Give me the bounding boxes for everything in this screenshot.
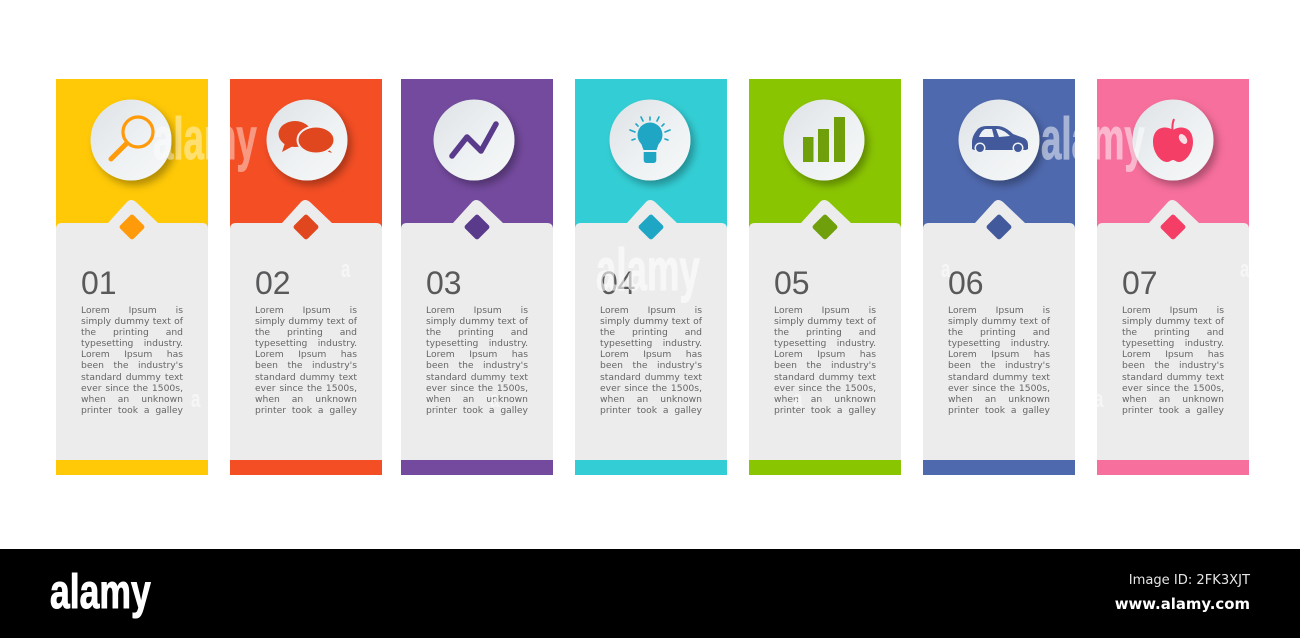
icon: light bulb — [610, 100, 690, 180]
watermark fragments: a — [490, 386, 499, 413]
body text: printer took a galley — [948, 405, 1050, 416]
body text: Lorem Ipsum has — [255, 349, 357, 360]
body text: simply dummy text of — [948, 316, 1050, 327]
icon: diamond marker — [986, 214, 1012, 240]
icon: diamond marker — [119, 214, 145, 240]
body text: ever since the 1500s, — [774, 383, 876, 394]
body text: when an unknown — [81, 394, 183, 405]
watermark: upper right: alamy — [1041, 106, 1145, 172]
body text: simply dummy text of — [255, 316, 357, 327]
body text: printer took a galley — [426, 405, 528, 416]
body text — [255, 305, 358, 416]
body text: Lorem Ipsum has — [948, 349, 1050, 360]
body text: standard dummy text — [426, 372, 528, 383]
body text: simply dummy text of — [426, 316, 528, 327]
watermark fragments: a — [941, 256, 950, 283]
body text: typesetting industry. — [81, 338, 183, 349]
body text: the printing and — [600, 327, 702, 338]
icon: bar chart — [784, 100, 864, 180]
icon: car — [958, 100, 1040, 180]
body text — [1122, 305, 1224, 416]
body text: been the industry's — [426, 360, 528, 371]
watermark fragments: a — [191, 386, 200, 413]
icon: magnifying glass — [90, 100, 172, 180]
icon: diamond marker — [638, 214, 664, 240]
step number: 06 — [948, 265, 984, 301]
body text — [774, 305, 876, 416]
step number: 02 — [255, 265, 291, 301]
body text: simply dummy text of — [1122, 316, 1224, 327]
panel: step 06 — [923, 79, 1075, 475]
body text: the printing and — [81, 327, 183, 338]
body text — [426, 305, 528, 416]
body text: Lorem Ipsum has — [1122, 349, 1224, 360]
body text: when an unknown — [255, 394, 357, 405]
body text: typesetting industry. — [426, 338, 528, 349]
body text: Lorem Ipsum has — [81, 349, 183, 360]
body text: standard dummy text — [774, 372, 876, 383]
body text: typesetting industry. — [600, 338, 702, 349]
body text — [81, 305, 184, 416]
body text: Lorem Ipsum has — [600, 349, 702, 360]
body text: simply dummy text of — [600, 316, 702, 327]
body text: standard dummy text — [600, 372, 702, 383]
body text: the printing and — [426, 327, 528, 338]
body text: Lorem Ipsum is — [774, 305, 876, 316]
body text: Lorem Ipsum has — [426, 349, 528, 360]
body text: ever since the 1500s, — [1122, 383, 1224, 394]
body text: standard dummy text — [948, 372, 1050, 383]
body text: been the industry's — [255, 360, 357, 371]
icon: diamond marker — [812, 214, 838, 240]
body text: been the industry's — [948, 360, 1050, 371]
body text: when an unknown — [948, 394, 1050, 405]
watermark: centre: alamy — [596, 237, 700, 303]
body text: ever since the 1500s, — [426, 383, 528, 394]
watermark fragments: a — [1240, 256, 1249, 283]
body text: printer took a galley — [81, 405, 183, 416]
body text: standard dummy text — [255, 372, 357, 383]
panel: step 07 — [1097, 79, 1249, 475]
panel: step 03 — [401, 79, 553, 475]
body text: ever since the 1500s, — [255, 383, 357, 394]
body text: been the industry's — [774, 360, 876, 371]
body text: simply dummy text of — [774, 316, 876, 327]
icon: diamond marker — [293, 214, 319, 240]
body text: typesetting industry. — [1122, 338, 1224, 349]
body text: the printing and — [948, 327, 1050, 338]
body text: when an unknown — [600, 394, 702, 405]
panel: step 04 — [575, 79, 727, 475]
body text: simply dummy text of — [81, 316, 183, 327]
website: www.alamy.com — [1115, 595, 1250, 613]
body text: Lorem Ipsum is — [255, 305, 357, 316]
body text: printer took a galley — [600, 405, 702, 416]
watermark: upper left: alamy — [153, 106, 257, 172]
step number: 03 — [426, 265, 462, 301]
body text: been the industry's — [81, 360, 183, 371]
body text: the printing and — [255, 327, 357, 338]
body text: the printing and — [774, 327, 876, 338]
step number: 01 — [81, 265, 117, 301]
body text: Lorem Ipsum is — [81, 305, 183, 316]
body text: typesetting industry. — [774, 338, 876, 349]
footer bar — [0, 549, 1300, 638]
watermark fragments: a — [341, 256, 350, 283]
step number: 07 — [1122, 265, 1158, 301]
icon: trend line — [434, 100, 514, 180]
panel: step 01 — [56, 79, 208, 475]
step number: 05 — [774, 265, 810, 301]
body text: the printing and — [1122, 327, 1224, 338]
body text: Lorem Ipsum is — [600, 305, 702, 316]
body text: Lorem Ipsum is — [948, 305, 1050, 316]
body text: ever since the 1500s, — [948, 383, 1050, 394]
watermark fragments — [191, 256, 1249, 413]
body text: Lorem Ipsum has — [774, 349, 876, 360]
panel: step 02 — [230, 79, 382, 475]
step number: 04 — [600, 265, 636, 301]
footer logo: alamy — [50, 566, 151, 619]
body text: when an unknown — [774, 394, 876, 405]
panel: step 05 — [749, 79, 901, 475]
body text: ever since the 1500s, — [600, 383, 702, 394]
icon: diamond marker — [464, 214, 490, 240]
body text: standard dummy text — [1122, 372, 1224, 383]
body text: printer took a galley — [774, 405, 876, 416]
body text: typesetting industry. — [948, 338, 1050, 349]
body text: printer took a galley — [1122, 405, 1224, 416]
body text: been the industry's — [1122, 360, 1224, 371]
body text: been the industry's — [600, 360, 702, 371]
body text — [600, 305, 702, 416]
body text: standard dummy text — [81, 372, 183, 383]
watermark fragments: a — [1094, 386, 1103, 413]
watermark fragments: a — [793, 386, 802, 413]
body text: typesetting industry. — [255, 338, 357, 349]
icon: diamond marker — [1160, 214, 1186, 240]
body text: printer took a galley — [255, 405, 357, 416]
body text: when an unknown — [1122, 394, 1224, 405]
icon: speech bubbles — [266, 100, 348, 180]
body text — [948, 305, 1050, 416]
body text: ever since the 1500s, — [81, 383, 183, 394]
body text: when an unknown — [426, 394, 528, 405]
icon: apple — [1132, 100, 1214, 180]
body text: Lorem Ipsum is — [1122, 305, 1224, 316]
image id: Image ID: 2FK3XJT — [1129, 573, 1250, 588]
body text: Lorem Ipsum is — [426, 305, 528, 316]
